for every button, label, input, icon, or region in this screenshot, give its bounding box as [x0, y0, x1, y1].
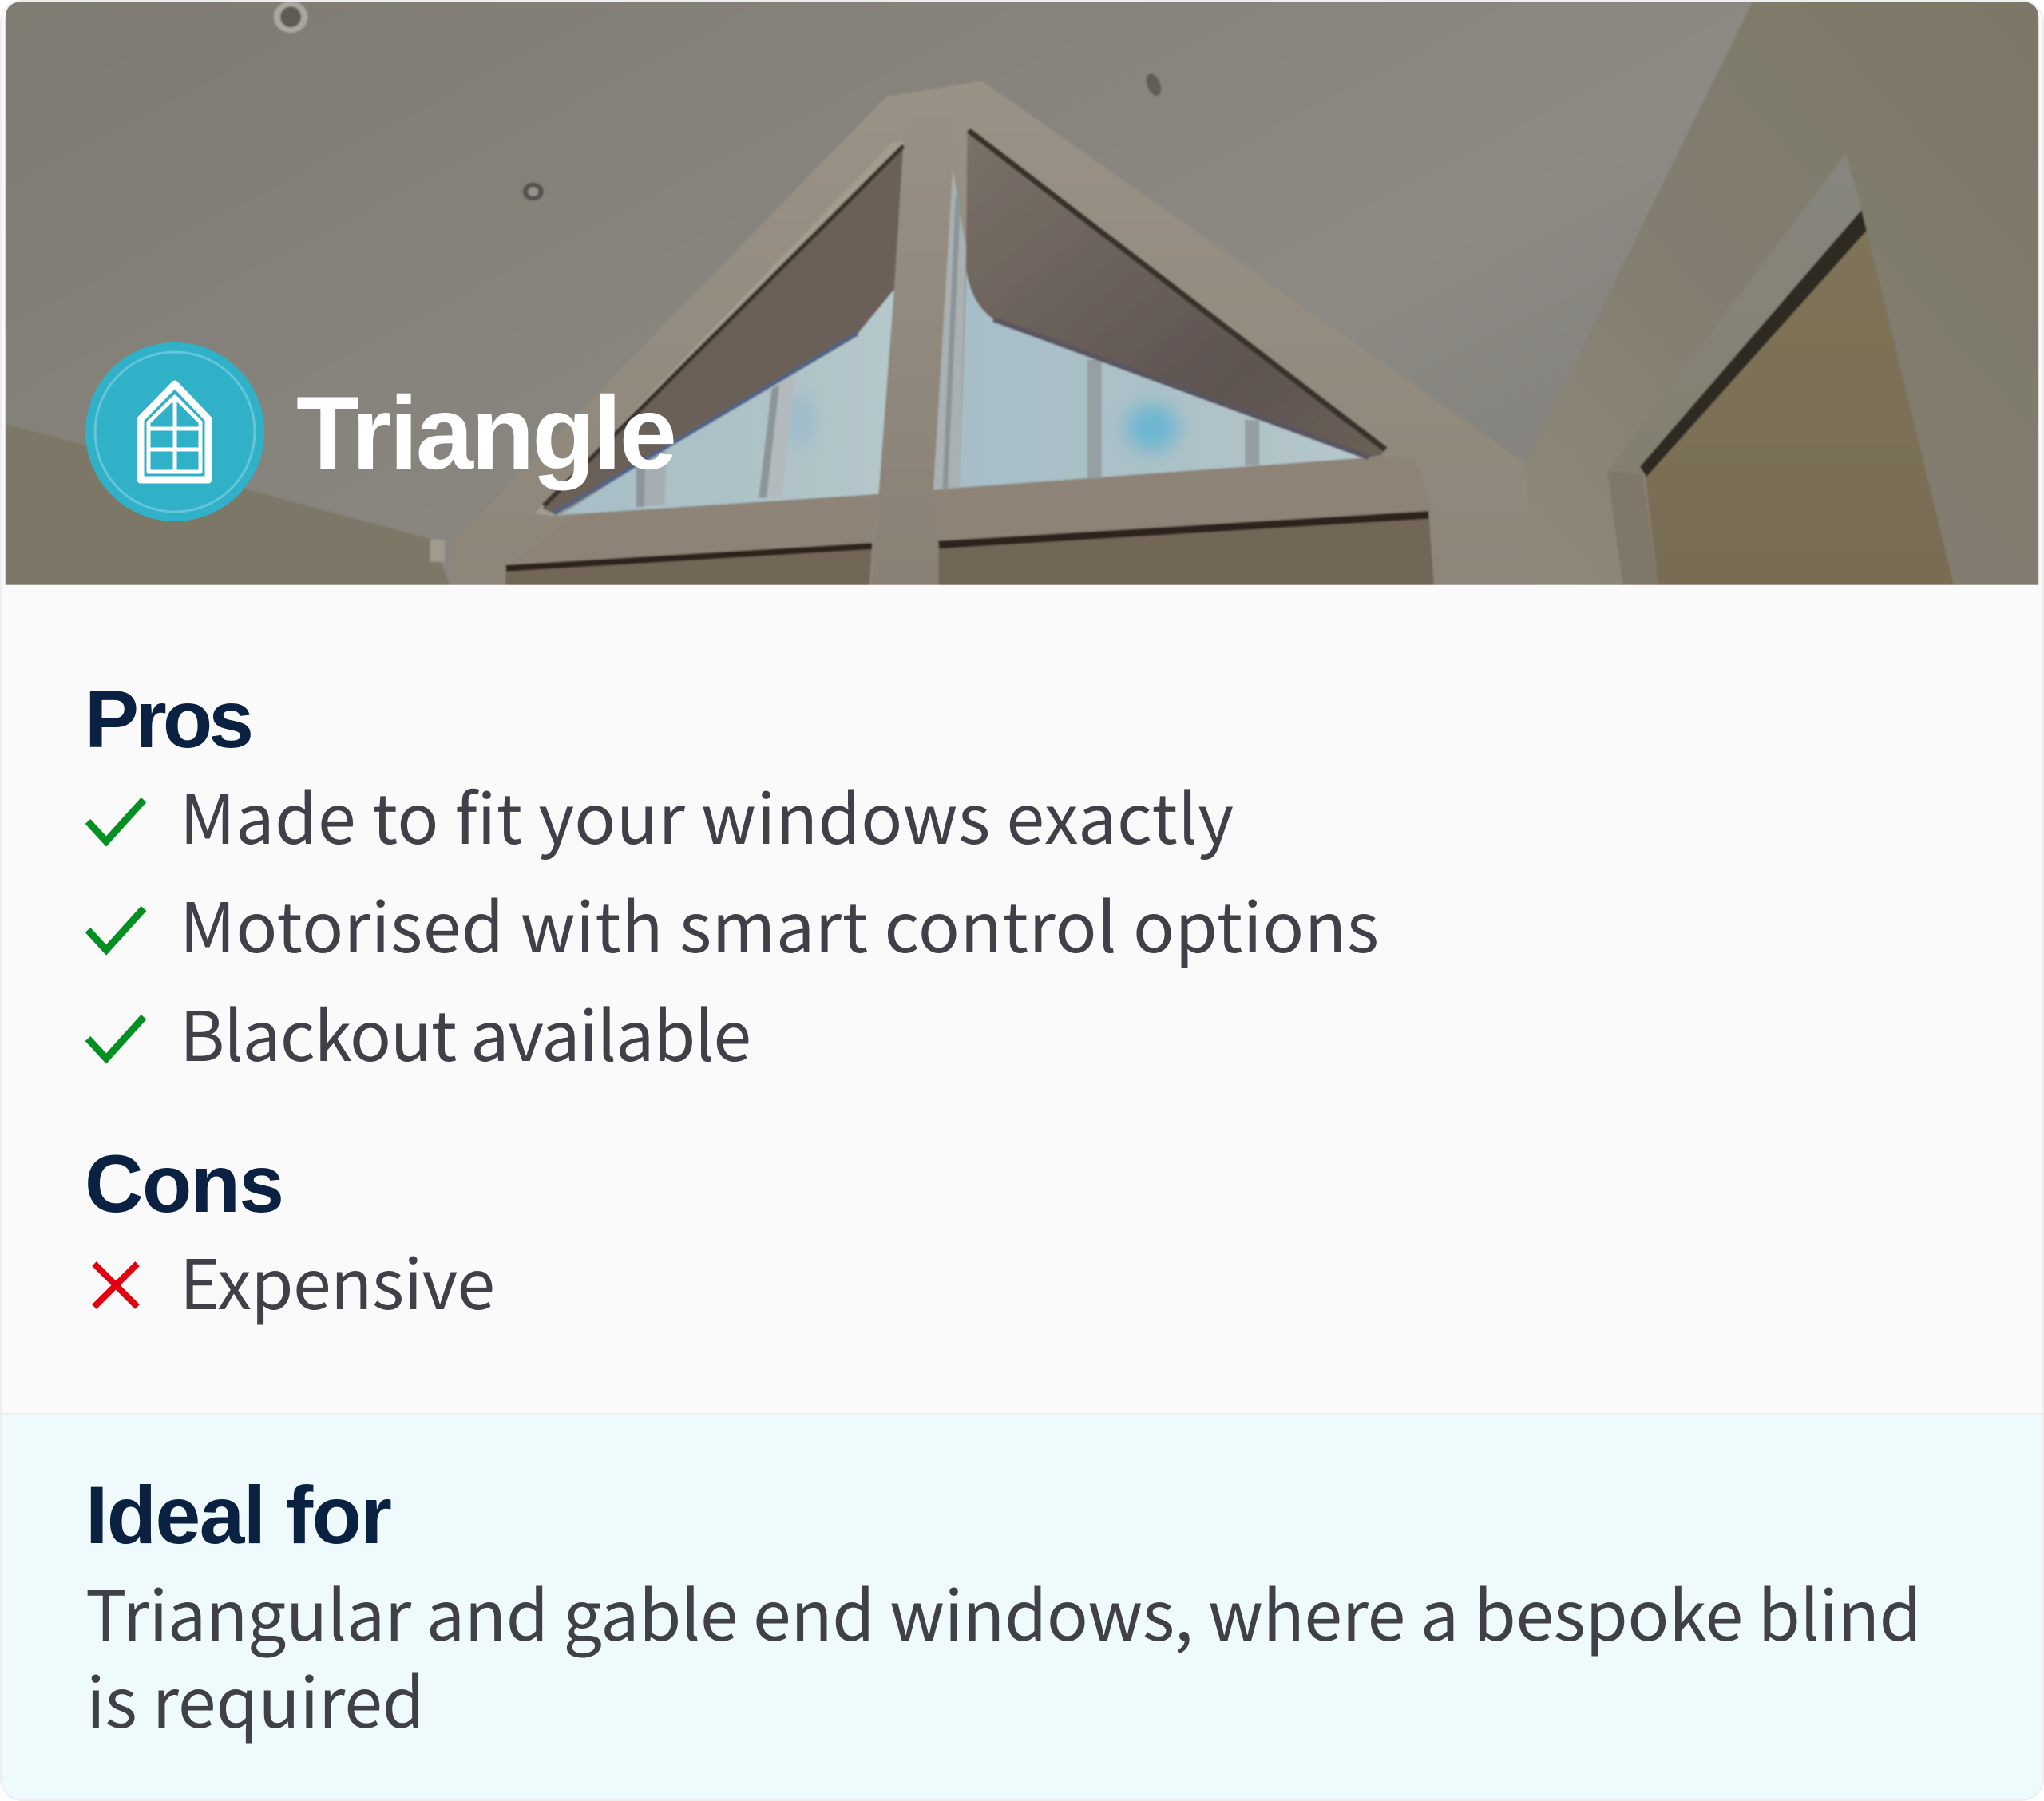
icon: teal badge with window [85, 342, 264, 521]
left pane: glass [561, 287, 894, 515]
text: ideal for description, line two: is required [86, 1648, 425, 1748]
pro: made to fit: Made to fit your windows exactly [180, 764, 1234, 864]
ceiling and walls [6, 0, 2038, 585]
pros list [88, 764, 1379, 1081]
ceiling lights and switch [274, 2, 1164, 562]
heading: Ideal for: Ideal for [85, 1470, 392, 1561]
card background [2, 1413, 2042, 1799]
heading: Pros: Pros [85, 674, 254, 765]
window frame [450, 81, 1535, 585]
cons list [94, 1229, 495, 1329]
pro: motorised: Motorised with smart control options [180, 873, 1379, 972]
icon: check mark [88, 800, 144, 841]
con: expensive: Expensive [180, 1229, 495, 1329]
left pane: blind [542, 144, 903, 513]
icon: check mark [88, 1017, 144, 1059]
right window [1607, 154, 1954, 585]
pro: blackout: Blackout available [180, 981, 751, 1081]
right pane: glass [933, 169, 1369, 490]
icon: check mark [88, 908, 144, 950]
title: Triangle: Triangle [296, 374, 677, 491]
photo: gable window with triangular blinds [6, 0, 2038, 585]
heading: Cons: Cons [85, 1138, 284, 1229]
text: ideal for description: Triangular and gable end windows, where a bespoke blind [85, 1561, 1922, 1660]
panel: ideal for [85, 1470, 1922, 1748]
icon: red cross [94, 1264, 137, 1307]
lower blinds [505, 513, 1434, 585]
right pane: blind [966, 129, 1386, 457]
